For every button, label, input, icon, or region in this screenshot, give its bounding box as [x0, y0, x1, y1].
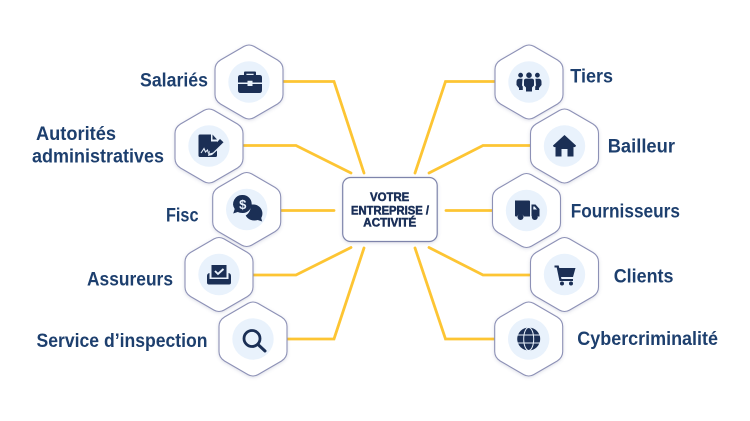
- icon: checked inbox tray: [207, 265, 231, 284]
- icon: magnifying glass: [244, 330, 265, 351]
- icon: signed document: [198, 134, 224, 157]
- central box: [343, 178, 437, 242]
- node: Tiers: [495, 45, 563, 119]
- central text: ACTIVITÉ: [363, 217, 417, 230]
- node: Fisc: [213, 172, 281, 246]
- label: Tiers: Tiers: [570, 67, 613, 88]
- label: Fournisseurs: Fournisseurs: [571, 202, 680, 223]
- icon: briefcase: [238, 72, 262, 93]
- central text: VOTRE: [370, 192, 410, 204]
- label: Cybercriminalité: Cybercriminalité: [577, 329, 718, 350]
- central text: [351, 192, 430, 230]
- label: Autorités administratives: administratives: [32, 147, 164, 168]
- label: Autorités administratives: [32, 124, 164, 168]
- node: Autorités administratives: [175, 109, 243, 183]
- node: Service d'inspection: [219, 302, 287, 376]
- connector lines: [244, 82, 530, 339]
- label: Fisc: Fisc: [166, 206, 199, 227]
- node: Assureurs: [185, 238, 253, 312]
- icon: house: [553, 135, 576, 156]
- label: Bailleur: Bailleur: [608, 137, 676, 158]
- node: Clients: [530, 238, 598, 312]
- icon: group of people: [516, 72, 542, 92]
- icon: shopping cart: [554, 266, 576, 286]
- label: Service d'inspection: Service d’inspection: [36, 331, 208, 352]
- label: Assureurs: Assureurs: [87, 270, 173, 291]
- icon: money chat bubbles: [233, 195, 262, 222]
- dollar sign: $: [239, 197, 247, 212]
- node: Fournisseurs: [492, 174, 560, 248]
- node: Cybercriminalité: [495, 302, 563, 376]
- icon: globe: [517, 328, 540, 350]
- label: Autorités administratives: Autorités: [36, 124, 116, 145]
- icon: delivery truck: [515, 200, 540, 220]
- node: Bailleur: [530, 109, 598, 183]
- label: Salariés: Salariés: [140, 71, 208, 92]
- label: Clients: Clients: [614, 267, 674, 288]
- central text: ENTREPRISE /: [351, 206, 430, 218]
- node: Salariés: [215, 45, 283, 119]
